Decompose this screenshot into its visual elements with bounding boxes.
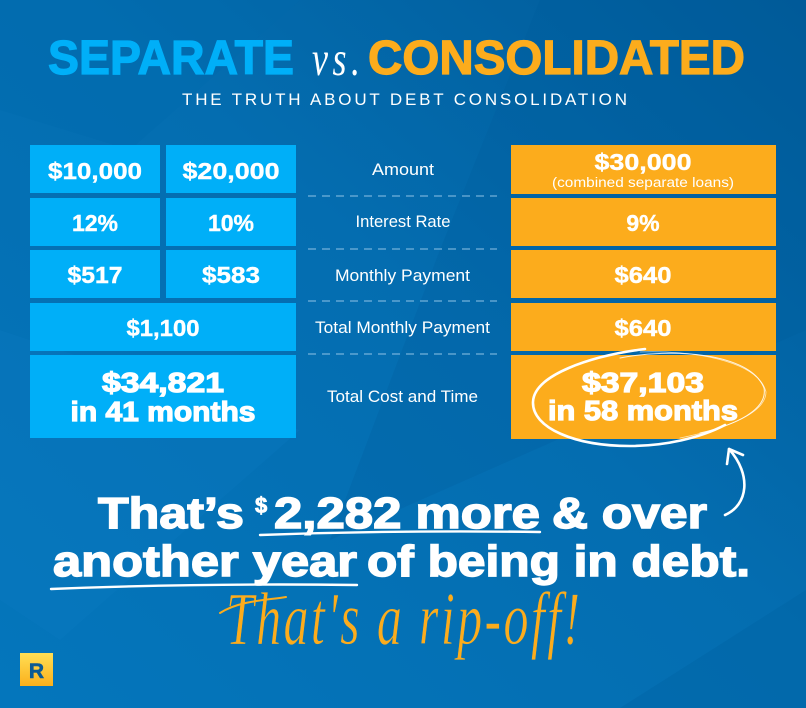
headline line 1: That’s xyxy=(98,489,244,538)
cell: second monthly payment: $583 xyxy=(202,262,260,288)
label: interest rate: Interest Rate xyxy=(356,213,450,231)
cell: second monthly payment xyxy=(166,250,296,298)
panel: row labels xyxy=(308,161,497,406)
cell: first loan amount: $10,000 xyxy=(48,158,142,184)
panel: consolidated loan xyxy=(511,145,776,439)
headline xyxy=(51,489,750,589)
cell: total cost and time: in 41 months xyxy=(70,396,256,427)
cell: combined amount: $30,000 xyxy=(594,149,692,175)
logo xyxy=(20,653,53,686)
panel: separate loans xyxy=(30,145,296,438)
cell: total monthly payment: $1,100 xyxy=(126,315,200,341)
headline line 2 xyxy=(51,537,750,589)
cell: second interest rate xyxy=(166,198,296,246)
headline line 1: & over xyxy=(552,489,707,538)
cell: combined amount: (combined separate loans) xyxy=(552,175,734,190)
cell: first loan amount xyxy=(30,145,160,193)
label: amount: Amount xyxy=(372,161,434,179)
label: monthly payment: Monthly Payment xyxy=(335,267,470,285)
subtitle: THE TRUTH ABOUT DEBT CONSOLIDATION xyxy=(182,90,627,109)
cell: total cost and time xyxy=(30,355,296,438)
label: total monthly payment: Total Monthly Payment xyxy=(315,319,490,337)
headline line 1 xyxy=(98,489,707,538)
title xyxy=(48,32,745,86)
cell: total monthly payment: $640 xyxy=(614,315,672,341)
icon: hand-drawn circle xyxy=(533,349,766,446)
cell: second loan amount: $20,000 xyxy=(182,158,280,184)
headline line 1: $ xyxy=(255,493,267,518)
cell: interest rate: 9% xyxy=(626,210,660,236)
cell: total cost and time: in 58 months xyxy=(548,395,738,426)
headline line 1: 2,282 more xyxy=(274,489,540,538)
headline line 2: another year xyxy=(53,537,357,586)
cell: first interest rate xyxy=(30,198,160,246)
cell: first monthly payment xyxy=(30,250,160,298)
title word: Consolidated: CONSOLIDATED xyxy=(368,32,745,85)
cell: monthly payment xyxy=(511,250,776,298)
label: total cost and time: Total Cost and Time xyxy=(327,388,478,406)
arrow xyxy=(725,449,744,515)
cell: second loan amount xyxy=(166,145,296,193)
cell: total cost and time: $37,103 xyxy=(582,367,704,398)
title word: vs.: vs. xyxy=(312,33,360,86)
cell: total monthly payment xyxy=(511,303,776,351)
handwritten callout: That's a rip-off! xyxy=(226,577,580,660)
cell: combined amount xyxy=(511,145,776,194)
cell: second interest rate: 10% xyxy=(208,210,254,236)
logo: R xyxy=(29,660,44,683)
cell: total monthly payment xyxy=(30,303,296,351)
headline line 2: of being in debt. xyxy=(367,537,750,586)
title word: Separate: SEPARATE xyxy=(48,32,294,85)
cell: monthly payment: $640 xyxy=(614,262,672,288)
cell: total cost and time: $34,821 xyxy=(102,367,224,398)
cell: first interest rate: 12% xyxy=(72,210,118,236)
cell: first monthly payment: $517 xyxy=(68,262,122,288)
cell: interest rate xyxy=(511,198,776,246)
cell: total cost and time xyxy=(511,355,776,439)
